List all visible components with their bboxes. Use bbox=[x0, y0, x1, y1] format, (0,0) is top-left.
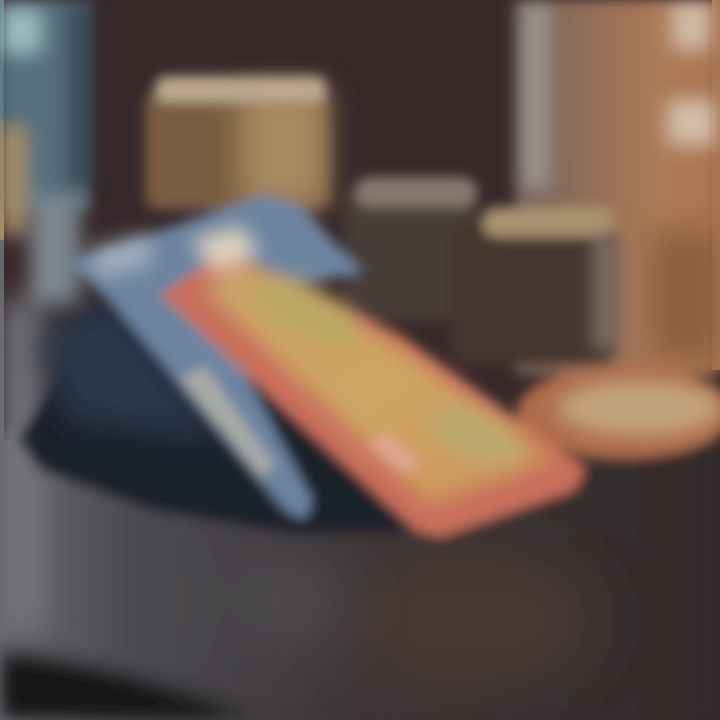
table surface bbox=[0, 300, 720, 720]
coaster bbox=[517, 366, 720, 458]
tall amber jar, right bbox=[515, 0, 720, 375]
card emblem: upper bbox=[243, 262, 367, 358]
blue credit card bbox=[68, 195, 362, 520]
blue glass at left edge bbox=[0, 0, 90, 305]
dark glasses, right bbox=[345, 177, 618, 365]
card highlight corner bbox=[192, 226, 260, 274]
card yellow face bbox=[205, 262, 555, 505]
coffee cup, centre bbox=[145, 76, 330, 210]
card stripe highlight bbox=[368, 434, 422, 474]
orange credit card bbox=[160, 226, 585, 537]
dark wallet shadow bbox=[18, 295, 440, 535]
card emblem: lower bbox=[420, 394, 530, 478]
